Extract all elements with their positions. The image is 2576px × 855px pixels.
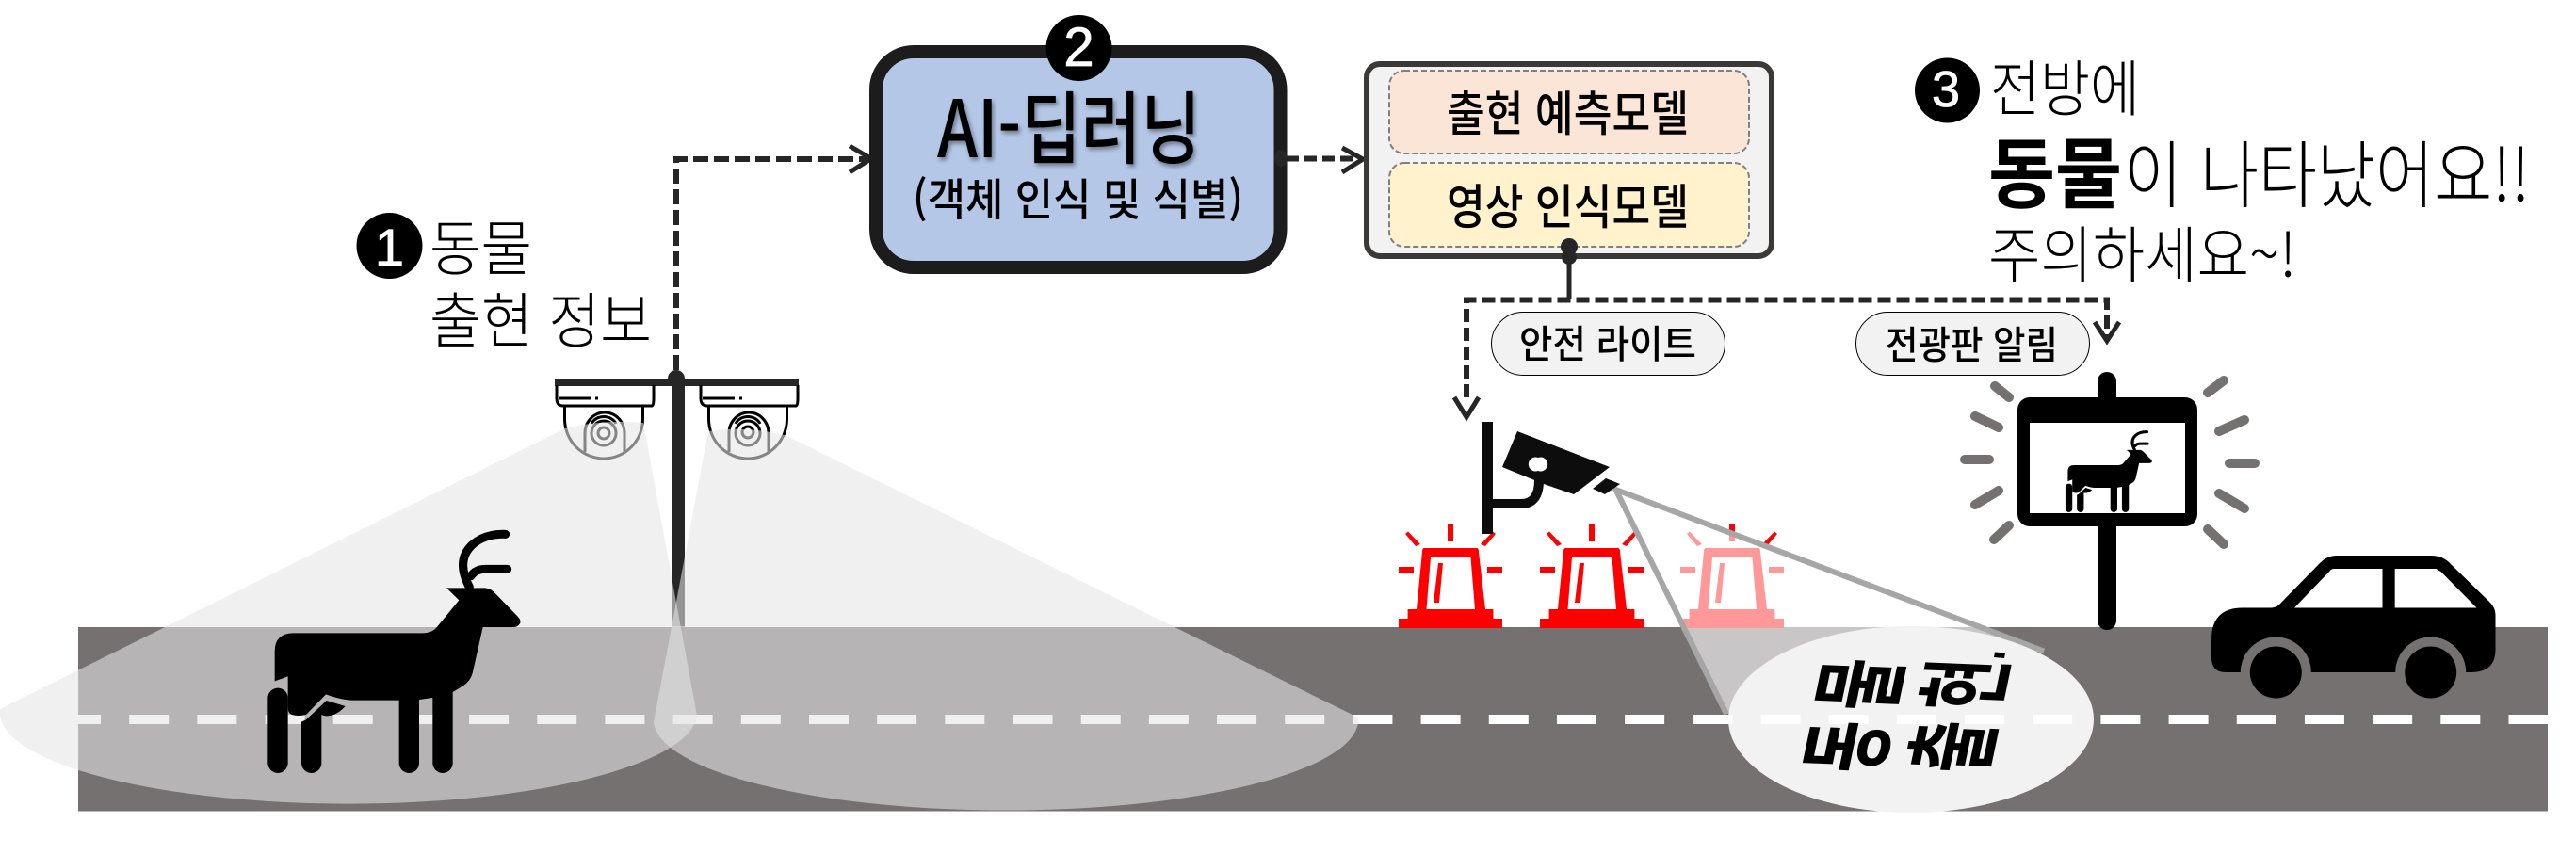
model: appearance prediction [1389, 71, 1749, 153]
step 1 label: 동물 [429, 202, 532, 288]
beam edges [1616, 490, 2044, 714]
arrow: AI to models [1274, 148, 1363, 172]
connector: models to outputs [1454, 238, 2119, 417]
road marking callout ellipse [1728, 626, 2094, 813]
icon: CCTV camera [1482, 422, 1620, 534]
icon: deer on signboard [2066, 432, 2152, 512]
signboard flashing rays [1965, 380, 2255, 544]
step 1 label: 출현 정보 [429, 274, 652, 361]
lamp post [555, 370, 799, 627]
text: 객체 인식 및 식별: (객체 인식 및 식별) [913, 164, 1243, 229]
icon: electronic signboard [2017, 372, 2197, 630]
badge 2: 2 [1063, 17, 1094, 78]
marking line: 동물: 동물 [1767, 645, 1930, 775]
model: image recognition [1389, 163, 1749, 247]
arrow: camera to AI [676, 146, 871, 370]
detection cone right [654, 429, 1358, 811]
step 1 label: 1 [375, 218, 404, 277]
icon: dome camera right [701, 385, 798, 459]
marking dot [1994, 652, 2005, 658]
road center dashed line [78, 715, 2548, 724]
step 3 label: 전방에 [1990, 40, 2140, 128]
road marking text [1767, 645, 2035, 775]
model: appearance prediction: 출현 예측모델 [1447, 75, 1689, 145]
model: image recognition: 영상 인식모델 [1447, 169, 1689, 238]
step 1 label [356, 202, 652, 361]
panel: AI deep learning box [876, 52, 1281, 267]
step 3 label: 동물 [1988, 112, 2122, 224]
icon: car [2211, 556, 2496, 708]
safety light: right (under beam) [1680, 524, 1784, 628]
heading: AI-딥러닝: AI-딥러닝 [937, 67, 1201, 181]
marking line: 출현: 출현 [1872, 645, 2035, 775]
safety light: left [1399, 524, 1502, 628]
detection cone left [0, 422, 697, 804]
CCTV view beam [1616, 490, 2044, 714]
badge 2 [1045, 15, 1111, 81]
icon: dome camera left [557, 385, 654, 459]
panel: model container [1367, 64, 1772, 256]
pill: signboard alert: 전광판 알림 [1886, 314, 2058, 370]
road [78, 627, 2548, 812]
step 3 label [1915, 40, 2530, 295]
step 3 label: 주의하세요~! [1988, 206, 2296, 295]
safety light: middle [1540, 524, 1644, 628]
pill: safety light: 안전 라이트 [1519, 313, 1696, 369]
icon: deer on road [267, 534, 520, 773]
step 3 label: 3 [1932, 61, 1960, 118]
